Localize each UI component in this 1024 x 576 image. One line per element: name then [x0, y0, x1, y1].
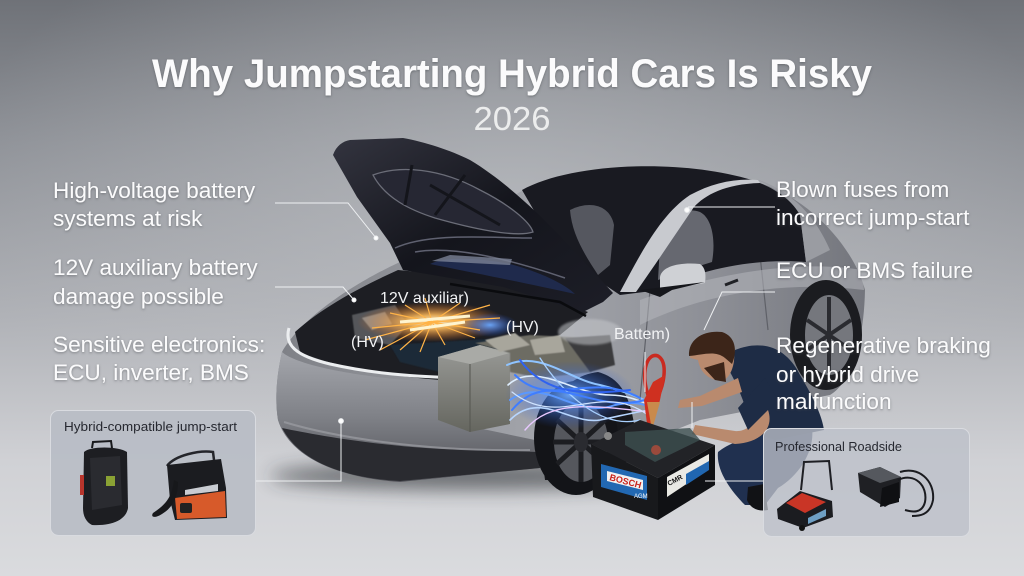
callout: sensitive electronics: ECU, inverter, BMS [53, 360, 249, 385]
leader lines [255, 203, 775, 481]
panel heading: Hybrid-compatible jump-start [64, 420, 238, 434]
icon: portable jump pack [152, 452, 227, 520]
open hood [333, 138, 613, 316]
icon: jump-starter backpack [80, 441, 128, 525]
legs [718, 428, 812, 505]
mechanic [678, 332, 824, 511]
callout: sensitive electronics: Sensitive electronics: [53, 332, 265, 357]
callout: regenerative braking: or hybrid drive [776, 362, 919, 387]
battery label: Bosch [601, 464, 648, 500]
lower grille [282, 428, 540, 481]
rear wheel [790, 280, 862, 390]
battery label: Bosch: AGM [634, 494, 648, 500]
head [690, 334, 734, 381]
hood inner stamping [373, 170, 533, 234]
label: HV right: (HV) [506, 319, 539, 336]
A-pillar and roof rail [620, 180, 760, 292]
callouts: right risks [776, 177, 991, 414]
car body [276, 168, 865, 482]
shirt [730, 345, 824, 440]
callout: high-voltage battery: systems at risk [53, 206, 203, 231]
callouts: left risks [53, 178, 265, 385]
in-image labels [351, 290, 670, 351]
rear seat [658, 210, 714, 280]
callout: 12V auxiliary: 12V auxiliary battery [53, 255, 258, 280]
LED headlight strip [288, 328, 470, 378]
side mirror [640, 264, 705, 297]
icon: red roadside booster [777, 461, 833, 531]
title: Why Jumpstarting Hybrid Cars Is Risky [152, 52, 873, 96]
shoe [747, 484, 768, 511]
year subtitle: 2026 [474, 100, 550, 137]
front wheel [534, 381, 618, 495]
label: 12V auxiliary: 12V auxiliar) [380, 290, 469, 307]
callout: ECU or BMS failure: ECU or BMS failure [776, 258, 973, 283]
panel: hybrid-compatible jump-start [50, 410, 256, 536]
red jumper clamp [644, 355, 665, 432]
callout: high-voltage battery: High-voltage battery [53, 178, 256, 203]
central battery module [438, 345, 510, 432]
hood underside blue glass [430, 259, 575, 294]
engine bay [295, 270, 588, 380]
arms [678, 378, 742, 408]
battery label: Bosch: BOSCH [608, 472, 642, 490]
label: HV left: (HV) [351, 334, 384, 351]
callout: blown fuses: incorrect jump-start [776, 205, 970, 230]
front seat [570, 205, 614, 275]
blue energy arcs [505, 358, 652, 430]
callout: regenerative braking: Regenerative braking [776, 333, 991, 358]
smoke [558, 319, 622, 345]
car shadow on floor [270, 462, 670, 490]
callout: blown fuses: Blown fuses from [776, 177, 949, 202]
car battery [591, 420, 715, 520]
wheel arch [540, 372, 636, 480]
illustration: hybrid car with open hood [276, 138, 865, 495]
panel heading: Professional Roadside [775, 440, 902, 454]
HV components [475, 333, 615, 378]
engine components [352, 305, 505, 372]
battery label: Panasonic: CMR [667, 474, 684, 488]
icon: booster cables unit [858, 467, 933, 516]
callout: 12V auxiliary: damage possible [53, 284, 224, 309]
spark burst [357, 298, 518, 352]
callout: regenerative braking: malfunction [776, 389, 892, 414]
panel: professional roadside [764, 428, 970, 536]
label: battery: Battem) [614, 326, 670, 343]
front bumper [276, 352, 540, 482]
door panel lines [640, 255, 768, 400]
hair and beard [689, 332, 735, 382]
roof and glass [522, 166, 806, 295]
